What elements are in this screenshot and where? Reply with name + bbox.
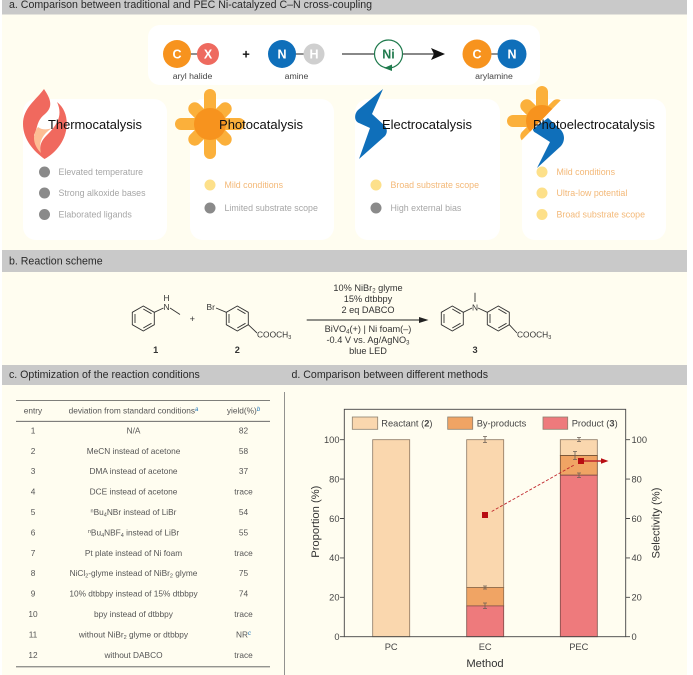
table header: yield(%): [227, 406, 257, 416]
heading: Photocatalysis: Photocatalysis: [219, 118, 303, 132]
x axis labels: PEC: [569, 642, 589, 652]
table rows: n: [88, 529, 91, 535]
arrow with conditions: 4: [346, 330, 350, 336]
atom: N: [268, 40, 296, 68]
table rows: 55: [239, 528, 248, 538]
item: Elaborated ligands: [58, 210, 132, 220]
card: Photoelectrocatalysis: [507, 86, 666, 240]
right axis labels: [632, 435, 647, 642]
left axis labels: 40: [329, 553, 340, 563]
plus sign: +: [242, 46, 250, 62]
table rows: MeCN instead of acetone: [87, 446, 181, 456]
table rows: Bu: [94, 507, 104, 517]
item: Ultra-low potential: [556, 188, 627, 198]
axis title: Selectivity: Selectivity (%): [650, 487, 662, 558]
table rows: without NiBr: [79, 630, 124, 640]
table rows: 4: [101, 533, 104, 539]
molecule 3: COOCH: [517, 330, 548, 340]
arrow with conditions: 2: [372, 288, 376, 294]
arrow with conditions: 15% dtbbpy: [344, 294, 393, 304]
table rows: 54: [239, 507, 248, 517]
axis title: Method: Method: [466, 658, 504, 670]
table header: b: [257, 407, 261, 413]
table rows: 8: [31, 568, 36, 578]
item: Broad substrate scope: [390, 180, 479, 190]
table header: a: [195, 407, 199, 413]
arrow with conditions: BiVO: [325, 324, 346, 334]
card: Electrocatalysis: [355, 89, 500, 240]
heading c: c. Optimization of the reaction conditions: [9, 369, 200, 381]
icon: lightning bolt: [533, 118, 564, 168]
icon: lightning bolt: [355, 89, 387, 159]
molecule 1: N: [164, 302, 170, 312]
table header: [24, 406, 261, 416]
molecule 1: 1: [153, 345, 158, 355]
molecule 2: COOCH: [257, 330, 288, 340]
atom: X: [197, 43, 219, 65]
molecule 3: [441, 293, 551, 355]
error bars: [483, 436, 581, 608]
item: [536, 166, 616, 178]
right axis labels: 100: [632, 435, 647, 445]
table rows: 82: [239, 426, 248, 436]
table rows: 12: [28, 650, 38, 660]
x axis labels: EC: [479, 642, 492, 652]
table header: deviation from standard conditions: [69, 406, 195, 416]
item: Strong alkoxide bases: [58, 188, 146, 198]
arrow with conditions: [307, 283, 428, 356]
arrow with conditions: (+) | Ni foam(–): [349, 324, 411, 334]
table rows: 58: [239, 446, 248, 456]
bars EC: [467, 440, 504, 637]
reaction summary card: [148, 25, 540, 85]
table rows: trace: [234, 650, 253, 660]
table rows: NiCl: [70, 568, 85, 578]
table rows: trace: [234, 609, 253, 619]
atom: X: X: [204, 48, 213, 62]
table: optimization: [16, 400, 270, 667]
section b heading: b. Reaction scheme: [9, 256, 103, 268]
table rows: 4: [104, 512, 107, 518]
panel divider: [284, 392, 286, 675]
table rows: NBr instead of LiBr: [107, 507, 177, 517]
table rows: 5: [31, 507, 36, 517]
table rows: 74: [239, 588, 248, 598]
table rows: 3: [31, 466, 36, 476]
table rows: instead of LiBr: [124, 528, 179, 538]
table rows: glyme: [173, 568, 198, 578]
arrow with conditions: glyme: [376, 283, 403, 293]
left axis labels: 80: [329, 474, 340, 484]
arrow with Ni catalyst: Ni: [382, 48, 395, 62]
right axis labels: 0: [632, 632, 637, 642]
table rows: trace: [234, 486, 253, 496]
plus: +: [190, 314, 195, 324]
right axis labels: 60: [632, 514, 642, 524]
icon: sun: [175, 89, 245, 159]
left axis labels: 60: [329, 514, 340, 524]
table rows: 2: [85, 574, 88, 580]
left axis labels: 20: [329, 593, 340, 603]
atom: N product: [498, 40, 526, 68]
section b heading: [2, 250, 687, 272]
table rows: n: [91, 508, 94, 514]
table rows: 4: [31, 486, 36, 496]
table rows: 7: [31, 548, 36, 558]
item: High external bias: [390, 203, 462, 213]
molecule 3: 3: [472, 345, 478, 355]
legend: By-products: [477, 418, 527, 428]
arrow with conditions: 2 eq DABCO: [341, 305, 395, 315]
bars PC: [373, 440, 410, 637]
atom: C: C: [172, 48, 182, 62]
heading: Electrocatalysis: Electrocatalysis: [382, 118, 472, 132]
atom: C: [163, 40, 191, 68]
axis title: Proportion: Proportion (%): [310, 485, 322, 558]
arrow with conditions: 10% NiBr: [333, 283, 372, 293]
label: amine: amine: [285, 71, 308, 81]
x axis labels: PC: [385, 642, 398, 652]
chart: stacked bars with selectivity: [310, 409, 662, 670]
molecule 2: [206, 302, 291, 355]
table rows: NR: [236, 630, 248, 640]
table rows: -glyme instead of NiBr: [88, 568, 170, 578]
table rows: DCE instead of acetone: [90, 486, 178, 496]
item: Mild conditions: [556, 167, 616, 177]
card: Thermocatalysis: [23, 89, 167, 240]
arrow with conditions: blue LED: [349, 346, 387, 356]
left axis labels: [324, 435, 340, 642]
bars PEC: [560, 440, 597, 637]
table rows: glyme or dtbbpy: [127, 630, 189, 640]
table rows: 37: [239, 466, 248, 476]
legend: Product (3): [572, 418, 618, 428]
item: Elevated temperature: [58, 167, 143, 177]
icon: flame: [23, 89, 67, 159]
table rows: DMA instead of acetone: [89, 466, 178, 476]
legend: Reactant (2): [381, 418, 432, 428]
table header: entry: [24, 406, 43, 416]
table rows: NBF: [104, 528, 121, 538]
molecule 3: 3: [548, 335, 551, 341]
molecule 2: Br: [206, 302, 215, 312]
label: arylamine: arylamine: [475, 71, 513, 81]
table rows: Pt plate instead of Ni foam: [85, 548, 182, 558]
item: Mild conditions: [224, 180, 284, 190]
molecule 3: N: [472, 302, 478, 312]
table rows: c: [248, 631, 251, 637]
molecule 2: 2: [235, 345, 240, 355]
table rows: 75: [239, 568, 248, 578]
molecule 1: [132, 293, 180, 355]
table rows: 2: [31, 446, 36, 456]
molecule 1: H: [164, 293, 170, 303]
table rows: 1: [31, 426, 36, 436]
atom: N product: N: [507, 48, 517, 62]
atom: H: H: [309, 48, 319, 62]
axes frame: [340, 409, 630, 637]
label: aryl halide: aryl halide: [173, 71, 212, 81]
left axis labels: 100: [324, 435, 340, 445]
table rows: [28, 426, 253, 660]
table rows: without DABCO: [103, 650, 163, 660]
atom: C product: C: [472, 48, 482, 62]
table rows: 9: [31, 588, 36, 598]
item: Broad substrate scope: [556, 210, 645, 220]
atom: C product: [462, 40, 492, 68]
x axis labels: [385, 642, 589, 652]
arrow with Ni catalyst: [342, 40, 445, 71]
section a heading: [2, 0, 687, 14]
table rows: 4: [121, 533, 124, 539]
table rows: 10: [28, 609, 38, 619]
table rows: 11: [29, 630, 38, 640]
atom: H: [304, 44, 324, 64]
icon: half sun: [507, 86, 561, 140]
selectivity series: [482, 458, 608, 518]
table rows: N/A: [127, 426, 141, 436]
heading: Photoelectrocatalysis: Photoelectrocatalysis: [533, 118, 655, 132]
section c and d heading bar: [2, 365, 687, 385]
heading d: d. Comparison between different methods: [292, 369, 488, 381]
table rows: 6: [31, 528, 36, 538]
item: Limited substrate scope: [224, 203, 318, 213]
right axis labels: 20: [632, 593, 642, 603]
reaction scheme: [132, 283, 551, 356]
molecule 2: 3: [288, 335, 291, 341]
legend: [352, 417, 618, 429]
arrow with conditions: -0.4 V vs. Ag/AgNO: [326, 335, 406, 345]
right axis labels: 80: [632, 474, 642, 484]
table rows: Bu: [91, 528, 101, 538]
left axis labels: 0: [334, 632, 340, 642]
item: [204, 180, 284, 190]
table rows: trace: [234, 548, 253, 558]
table rows: 2: [170, 574, 173, 580]
table rows: 10% dtbbpy instead of 15% dtbbpy: [69, 588, 198, 598]
card: Photocatalysis: [175, 89, 334, 240]
heading: Thermocatalysis: Thermocatalysis: [48, 118, 142, 132]
arrow with conditions: 3: [406, 340, 410, 346]
table rows: 2: [124, 635, 127, 641]
atom: N: N: [277, 48, 287, 62]
table rows: bpy instead of dtbbpy: [94, 609, 174, 619]
right axis labels: 40: [632, 553, 642, 563]
